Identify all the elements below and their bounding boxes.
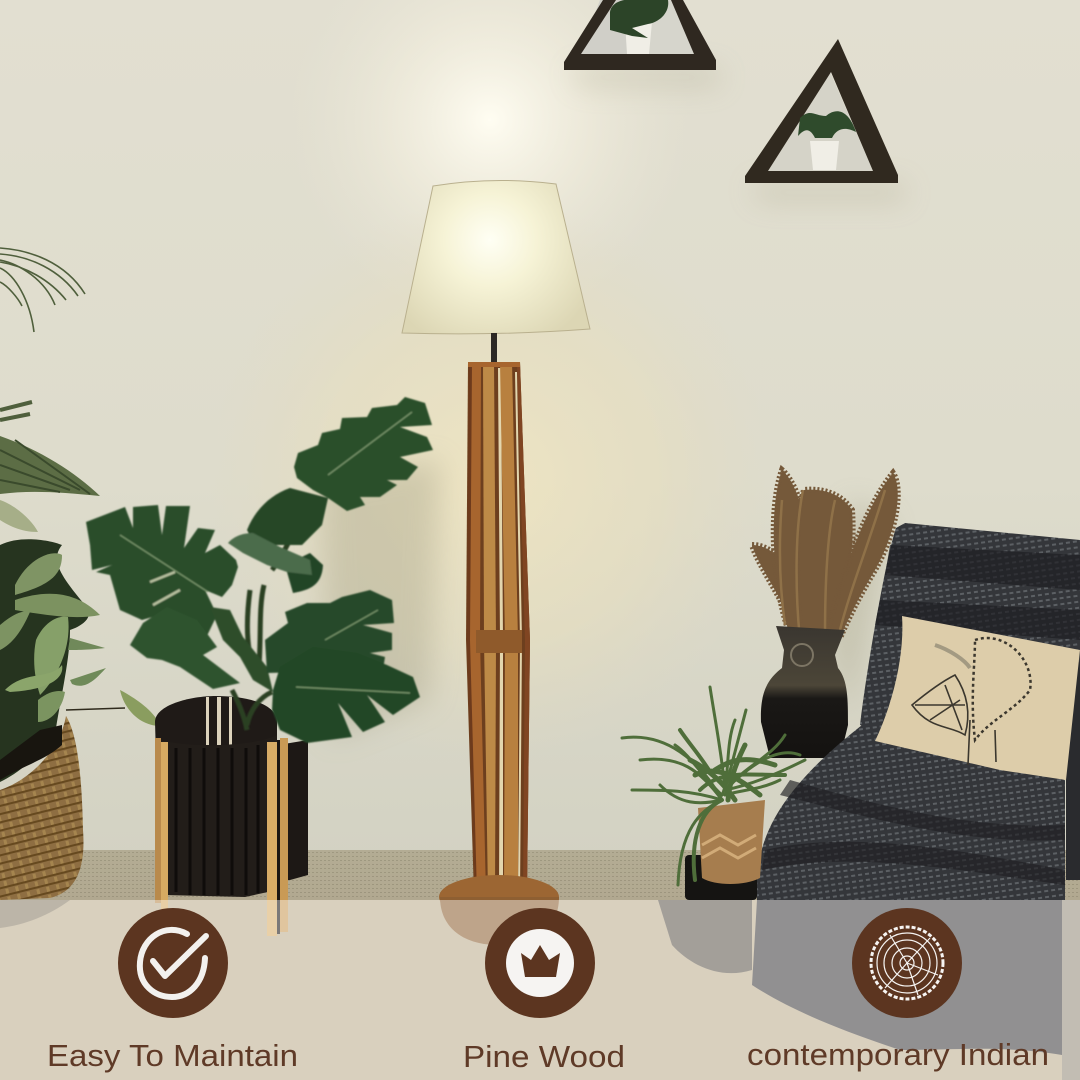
sofa with throw: [757, 523, 1080, 900]
leaf: lower left: [130, 607, 240, 689]
leaf: right upper: [265, 590, 394, 673]
dark sofa side: [1066, 660, 1080, 880]
leaf: centre narrow: [210, 607, 273, 692]
throw hanging below seat: [752, 900, 1062, 1055]
lamp shade: [402, 180, 590, 334]
small potted plant: [622, 687, 805, 900]
leaf: lower back: [285, 553, 323, 593]
overlay band: [0, 900, 1080, 1080]
black slatted planter front: [155, 735, 288, 936]
label: Pine Wood: [463, 1039, 625, 1074]
metal vase: [761, 626, 848, 758]
feature: contemporary indian: [747, 908, 1049, 1072]
throw back: [860, 523, 1080, 740]
floor lamp: [402, 180, 590, 945]
wall shelf: upper triangle: [564, 0, 716, 70]
wall shelf: lower triangle: [745, 39, 898, 183]
plant stand: [685, 855, 757, 900]
label: contemporary Indian: [747, 1037, 1049, 1072]
throw seat: [757, 722, 1065, 900]
icon: check badge: [118, 908, 228, 1018]
wall background: [0, 0, 1080, 860]
side floor darkening and shadow: [0, 900, 1080, 1080]
pillow botanical print: [912, 638, 1031, 765]
pillow: [875, 616, 1080, 780]
feature: pine wood: [463, 908, 625, 1074]
woven basket: [0, 716, 83, 900]
icon: crown badge: [485, 908, 595, 1018]
stems: [232, 520, 300, 730]
leaf: big left: [86, 505, 238, 640]
leaf: top right: [294, 397, 433, 511]
wall shadows: [320, 70, 905, 740]
label: Easy To Maintain: [47, 1038, 298, 1073]
leaf: big bottom: [272, 647, 420, 743]
feature: easy to maintain: [47, 908, 298, 1073]
lamp wooden body: [466, 362, 530, 895]
lamp round base: [439, 875, 559, 919]
leaf veins and slits: [120, 412, 412, 693]
pampas grass: [752, 470, 898, 640]
left leafy plant: [0, 500, 160, 782]
lamp rod: [491, 333, 497, 362]
left wall palm fronds: [0, 248, 100, 496]
black slatted planter back: [155, 696, 308, 895]
terracotta pot: [698, 800, 765, 884]
planter wood slats: [155, 738, 161, 903]
spider plant leaves: [622, 687, 805, 885]
carpet floor: [0, 850, 1080, 1080]
icon: tree rings badge: [852, 908, 962, 1018]
leaf: middle back: [247, 488, 328, 545]
monstera plant: [86, 397, 433, 743]
leaf: light middle: [228, 533, 312, 575]
